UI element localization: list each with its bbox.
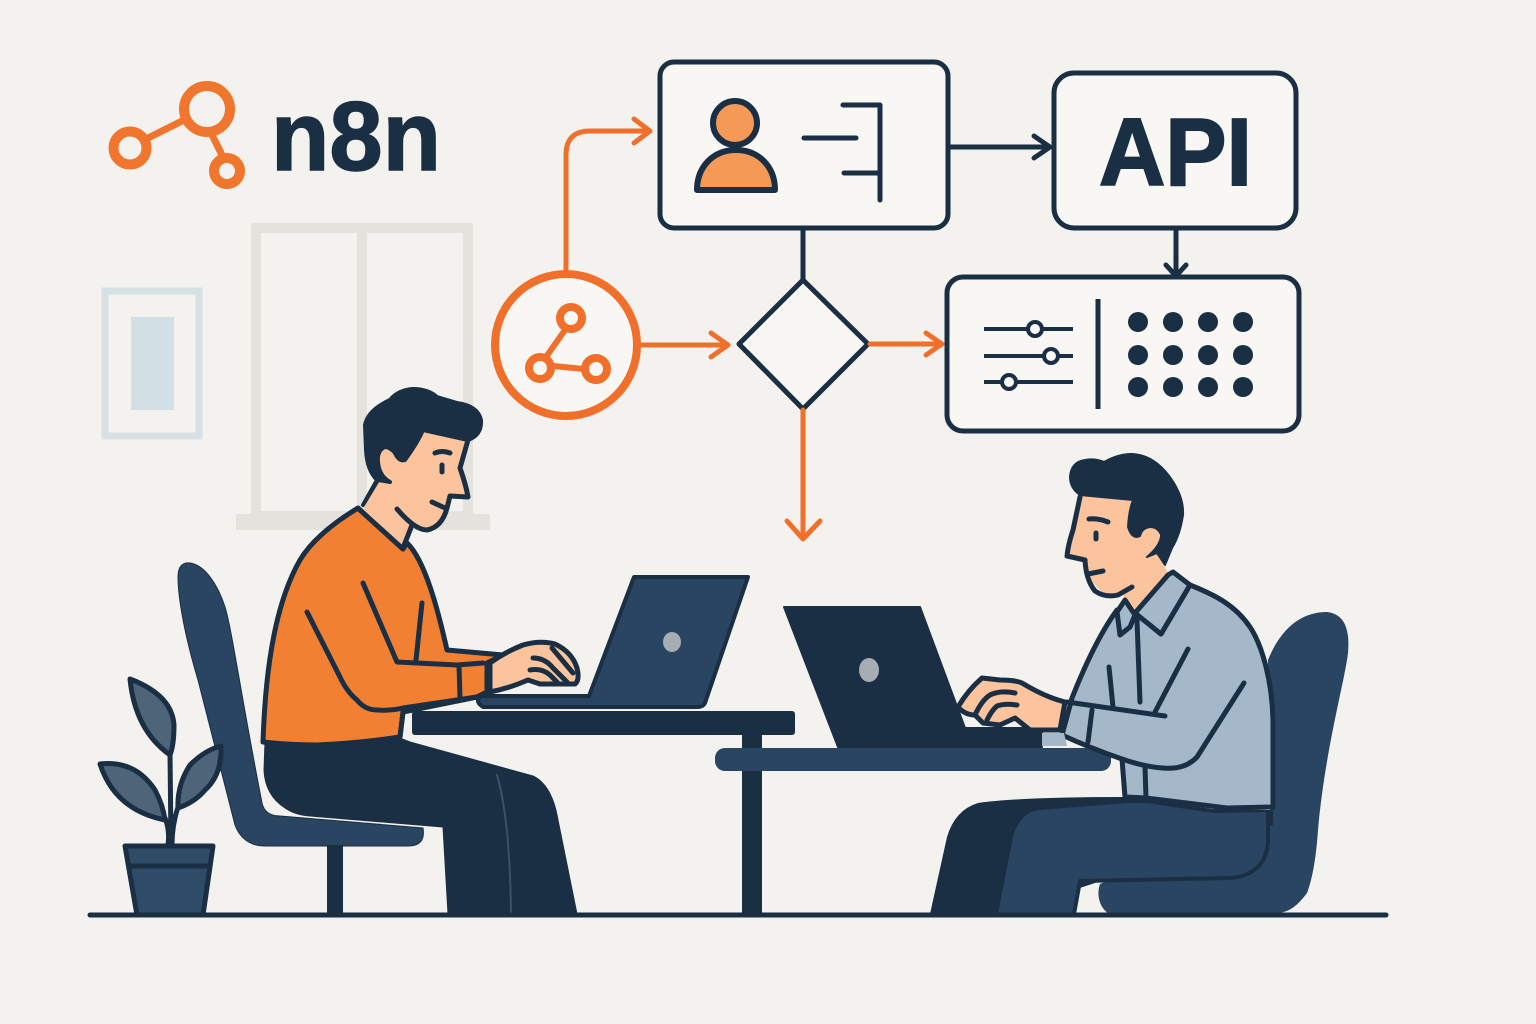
connector card to decision	[800, 229, 806, 280]
front leg	[998, 803, 1268, 914]
workflow trigger node	[495, 274, 637, 416]
decision diamond	[739, 280, 868, 409]
potted plant	[100, 679, 221, 915]
background window	[236, 228, 490, 530]
orange arrow to settings	[870, 333, 942, 355]
user icon	[697, 101, 775, 190]
sliders	[984, 322, 1073, 389]
user card	[660, 62, 948, 228]
head and neck	[1067, 495, 1168, 615]
n8n logo	[114, 81, 441, 191]
shirt collar	[1135, 572, 1190, 634]
plant stems	[165, 753, 178, 845]
divider	[1096, 299, 1100, 409]
orange arrow to decision	[640, 333, 728, 357]
hand	[958, 678, 1065, 730]
hair	[363, 389, 481, 505]
shirt lines	[1067, 620, 1244, 798]
orange arrow down	[787, 410, 820, 539]
collar	[360, 510, 403, 549]
API card: API	[1099, 99, 1252, 206]
hand	[490, 642, 578, 692]
sweater	[263, 508, 503, 745]
face outline	[397, 440, 468, 548]
settings card	[947, 277, 1299, 431]
arrow API to settings	[1166, 230, 1186, 276]
trigger icon	[529, 307, 607, 380]
facial features	[432, 452, 450, 508]
left laptop	[478, 577, 748, 707]
left person	[263, 389, 578, 914]
background wall picture	[105, 291, 199, 436]
floor line	[90, 912, 1386, 918]
right chair	[1098, 612, 1348, 913]
back leg	[930, 797, 1273, 914]
right person	[930, 454, 1273, 914]
left chair	[178, 563, 423, 914]
plant leaves	[100, 679, 221, 820]
logo icon	[114, 86, 240, 184]
arrow card to API	[950, 136, 1050, 158]
cuff underside	[1042, 733, 1067, 746]
front leg outline	[1074, 812, 1268, 914]
orange connector to user card	[566, 119, 650, 270]
right laptop	[784, 607, 1042, 747]
left desk	[412, 711, 795, 915]
hair	[1070, 454, 1183, 565]
shirt	[1062, 585, 1273, 808]
dot grid	[1128, 312, 1253, 397]
logo wordmark: n8n	[271, 81, 441, 191]
API card	[1054, 73, 1296, 228]
head and neck	[363, 430, 468, 548]
plant pot	[125, 846, 213, 915]
face outline	[1067, 497, 1132, 596]
right desk	[715, 748, 1111, 771]
trousers	[264, 737, 577, 914]
list marks	[804, 105, 880, 200]
facial features	[1088, 519, 1108, 574]
